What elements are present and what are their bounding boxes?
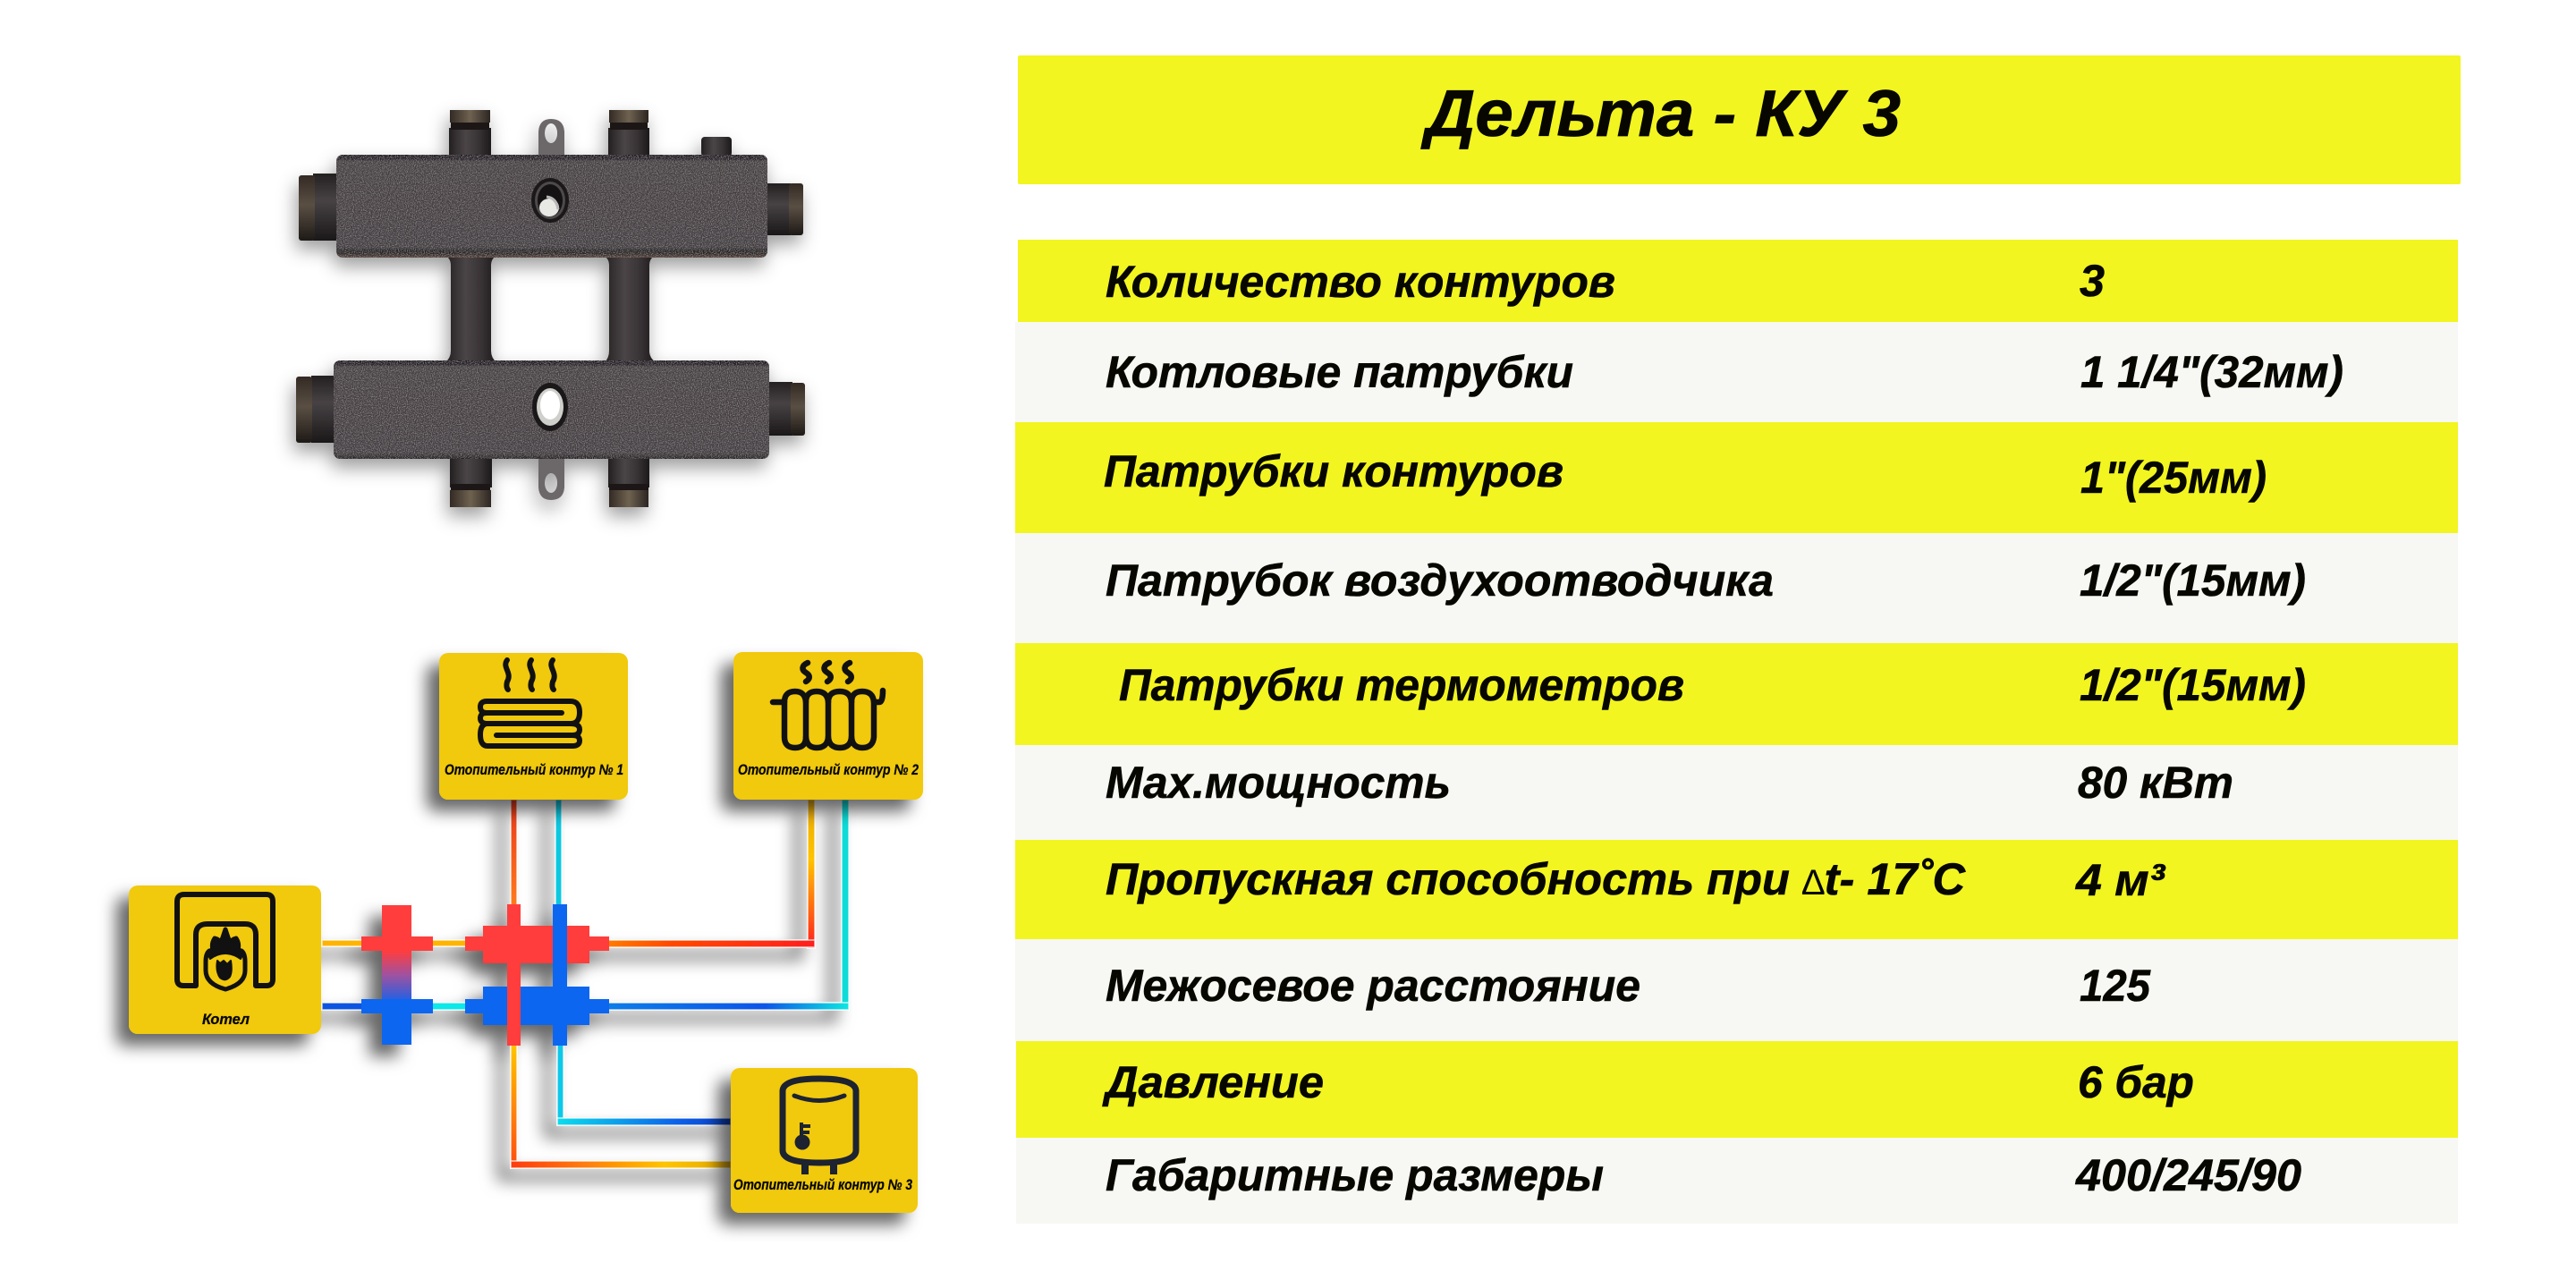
row: max power: 80 кВт: [2078, 758, 2233, 808]
row: air vent nozzle: 1/2"(15мм): [2080, 555, 2306, 606]
icon: radiator: [773, 663, 883, 748]
hydraulic separator cross: [361, 905, 433, 1045]
box: circuit 2: [733, 652, 923, 800]
pipes to circuit 1: [511, 800, 562, 907]
row: throughput: [1015, 840, 2458, 939]
title banner: [1018, 55, 2461, 184]
side fittings: [296, 174, 805, 443]
row: centre distance: 125: [2080, 961, 2151, 1011]
row: pressure: [1016, 1041, 2458, 1138]
lower port: [532, 383, 568, 431]
row: circuit nozzles: Патрубки контуров: [1104, 446, 1563, 496]
row: overall dimensions: Габаритные размеры: [1106, 1150, 1604, 1200]
row: centre distance: Межосевое расстояние: [1106, 961, 1640, 1011]
upper header: [336, 155, 767, 258]
specification table: [1015, 240, 2458, 1224]
box: circuit 3: [731, 1068, 918, 1213]
row: thermometer nozzles: 1/2"(15мм): [2080, 660, 2306, 710]
box: boiler: [129, 886, 321, 1034]
row: overall dimensions: 400/245/90: [2075, 1150, 2301, 1200]
boiler pipes: [322, 940, 467, 1010]
row: air vent nozzle: Патрубок воздухоотводчика: [1106, 555, 1774, 606]
lower header: [334, 360, 769, 459]
row: circuit nozzles: 1"(25мм): [2080, 453, 2267, 503]
vertical connecting pipes: [445, 255, 656, 362]
row: pressure: 6 бар: [2078, 1057, 2194, 1107]
icon: water tank: [783, 1079, 856, 1174]
row: boiler nozzles: Котловые патрубки: [1106, 347, 1573, 397]
row: circuit nozzles: [1015, 422, 2458, 533]
upper port: [531, 178, 569, 223]
row: number of circuits: 3: [2080, 256, 2105, 306]
row: throughput: Пропускная способность при ∆t- 17˚С: [1106, 854, 1966, 904]
shadowed pipes and manifolds: [322, 800, 849, 1168]
row: number of circuits: [1018, 240, 2458, 322]
manifold shadowed body: [296, 110, 805, 507]
label: circuit 1: Отопительный контур № 1: [445, 762, 623, 778]
row: max power: [1015, 745, 2458, 840]
row: pressure: Давление: [1102, 1057, 1324, 1107]
bottom nozzles with threads: [450, 457, 649, 507]
pipes to circuit 3: [511, 1045, 731, 1168]
row: centre distance: [1015, 939, 2458, 1041]
row: boiler nozzles: 1 1/4"(32мм): [2080, 347, 2343, 397]
hot riser: [507, 904, 521, 1046]
row: thermometer nozzles: Патрубки термометров: [1119, 660, 1684, 710]
product photo: hydraulic manifold: [296, 110, 805, 507]
row: overall dimensions: [1016, 1138, 2458, 1224]
hot manifold: [465, 926, 609, 963]
label: boiler: Котел: [202, 1012, 250, 1028]
label: circuit 3: Отопительный контур № 3: [733, 1177, 912, 1193]
cold manifold: [465, 987, 609, 1025]
row: max power: Мах.мощность: [1106, 758, 1451, 808]
box: circuit 1: [439, 653, 628, 800]
row: number of circuits: Количество контуров: [1106, 257, 1615, 307]
icon: underfloor heating: [480, 660, 580, 746]
row: air vent nozzle: [1015, 533, 2458, 643]
pipes to circuit 2: [608, 800, 849, 1010]
connection diagram: [129, 652, 923, 1213]
label: circuit 2: Отопительный контур № 2: [738, 762, 919, 778]
top nozzles with threads: [449, 110, 732, 157]
row: throughput: 4 м³: [2075, 855, 2165, 905]
row: boiler nozzles: [1015, 322, 2458, 422]
cold riser: [553, 904, 567, 1046]
icon: boiler with flame: [177, 894, 273, 989]
row: thermometer nozzles: [1015, 643, 2458, 745]
title text: Дельта - КУ 3: [1420, 78, 1901, 150]
